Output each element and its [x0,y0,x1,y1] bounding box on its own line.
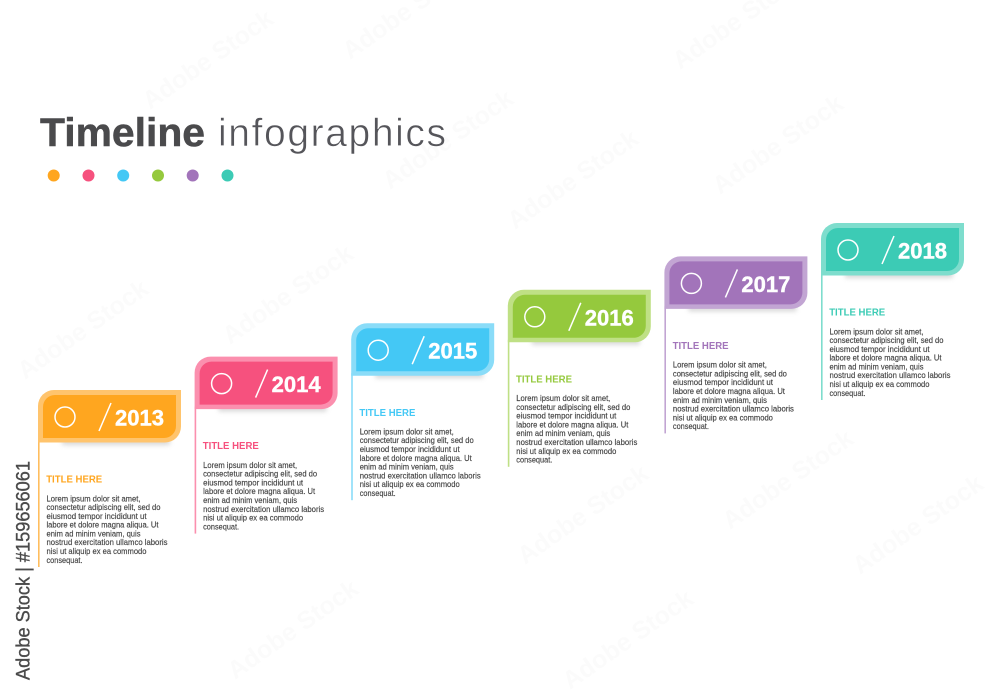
item text [830,326,950,398]
item text: consequat. [516,455,552,465]
item text: enim ad minim veniam, quis [673,395,767,405]
item text: labore et dolore magna aliqua. Ut [46,520,159,530]
item text [673,360,794,431]
watermark pattern: Adobe Stock [717,424,859,535]
timeline item: 2014 [195,357,338,534]
flag shadow [845,272,953,278]
item text: Lorem ipsum dolor sit amet, [673,360,767,370]
flag 2014 [195,357,338,409]
item title: TITLE HERE [516,373,572,385]
flag 2016 [508,290,651,342]
flag 2018 [821,223,964,276]
item text [203,460,324,531]
flag 2013 [38,390,181,442]
item text: nisi ut aliquip ex ea commodo [203,513,303,523]
item text: consectetur adipiscing elit, sed do [360,435,474,445]
item text: nisi ut aliquip ex ea commodo [360,479,460,489]
watermark pattern: Adobe Stock [557,584,699,695]
timeline item: 2016 [508,290,651,467]
timeline item: 2015 [351,323,494,500]
flag 2017: 2017 [741,272,790,297]
pole line [351,373,353,500]
flag 2015: 2015 [428,339,477,364]
item title: TITLE HERE [203,440,259,452]
item text: eiusmod tempor incididunt ut [203,477,304,487]
item text: Lorem ipsum dolor sit amet, [46,493,140,503]
item text: nostrud exercitation ullamco laboris [830,370,950,380]
item title: TITLE HERE [673,340,729,352]
pole line [508,340,509,467]
item text: enim ad minim veniam, quis [46,528,140,538]
timeline item: 2017 [664,256,807,433]
item text: nisi ut aliquip ex ea commodo [46,546,147,556]
flag shadow [62,439,170,445]
item text: consectetur adipiscing elit, sed do [516,402,630,412]
stock id side text: Adobe Stock | #159656061 [14,461,34,680]
item text [516,393,637,465]
item text: consequat. [46,555,82,565]
item text: nisi ut aliquip ex ea commodo [673,412,773,422]
watermark pattern: Adobe Stock [217,239,359,350]
item text [46,493,168,565]
item text: enim ad minim veniam, quis [830,361,924,371]
flag shadow [219,406,327,412]
item title: TITLE HERE [46,474,102,486]
item text: eiusmod tempor incididunt ut [46,511,147,521]
flag 2018: 2018 [898,238,947,264]
title [40,111,446,155]
watermark pattern: Adobe Stock [222,574,364,685]
watermark pattern: Adobe Stock [707,89,849,200]
item text: labore et dolore magna aliqua. Ut [516,419,629,429]
item text: labore et dolore magna aliqua. Ut [830,353,942,363]
flag 2013: 2013 [115,406,164,430]
item text: nostrud exercitation ullamco laboris [46,537,168,547]
item title: TITLE HERE [359,407,415,419]
item text: consequat. [830,388,866,398]
flag 2017 [664,256,807,309]
flag 2015 [351,323,494,376]
item text: consectetur adipiscing elit, sed do [46,502,161,512]
item text: eiusmod tempor incididunt ut [830,344,930,354]
item text: labore et dolore magna aliqua. Ut [673,386,785,396]
watermark pattern: Adobe Stock [502,124,644,235]
item text: eiusmod tempor incididunt ut [673,377,773,387]
watermark pattern: Adobe Stock [12,274,154,385]
item text: enim ad minim veniam, quis [360,462,454,472]
watermark pattern: Adobe Stock [377,84,519,195]
item text: nostrud exercitation ullamco laboris [203,504,324,514]
flag shadow [688,305,796,311]
item text: nostrud exercitation ullamco laboris [673,404,794,414]
item text: Lorem ipsum dolor sit amet, [360,426,454,436]
flag 2016: 2016 [585,305,634,330]
item text: eiusmod tempor incididunt ut [360,444,460,454]
item text: Lorem ipsum dolor sit amet, [203,460,297,470]
item text: consectetur adipiscing elit, sed do [203,469,317,479]
timeline item: 2018 [821,223,964,400]
pole line [821,273,823,400]
item text: Lorem ipsum dolor sit amet, [516,393,610,403]
watermark pattern: Adobe Stock [847,469,989,580]
item text: labore et dolore magna aliqua. Ut [203,486,316,496]
pole line [195,407,196,534]
item text: nisi ut aliquip ex ea commodo [830,379,930,389]
colour dots [48,170,234,182]
flag 2014: 2014 [272,372,321,397]
title: infographics [218,112,446,155]
flag shadow [532,339,640,345]
item text: consectetur adipiscing elit, sed do [673,368,787,378]
item text: nostrud exercitation ullamco laboris [516,437,637,447]
item text: labore et dolore magna aliqua. Ut [360,453,472,463]
item text: nostrud exercitation ullamco laboris [360,470,481,480]
pole line [664,306,666,433]
item text: eiusmod tempor incididunt ut [516,411,617,421]
item text: enim ad minim veniam, quis [516,428,610,438]
item text: consectetur adipiscing elit, sed do [830,335,944,345]
watermark pattern: Adobe Stock [512,459,654,570]
item title: TITLE HERE [829,307,885,319]
title: Timeline [40,111,205,155]
flag shadow [375,372,483,378]
item text: Lorem ipsum dolor sit amet, [830,326,924,336]
item text: enim ad minim veniam, quis [203,495,297,505]
watermark pattern: Adobe Stock [137,4,279,115]
pole line [38,440,40,567]
timeline item: 2013 [38,390,181,567]
item text: consequat. [673,421,709,431]
item text: nisi ut aliquip ex ea commodo [516,446,616,456]
item text: consequat. [203,521,239,531]
item text [360,426,481,498]
item text: consequat. [360,488,396,498]
